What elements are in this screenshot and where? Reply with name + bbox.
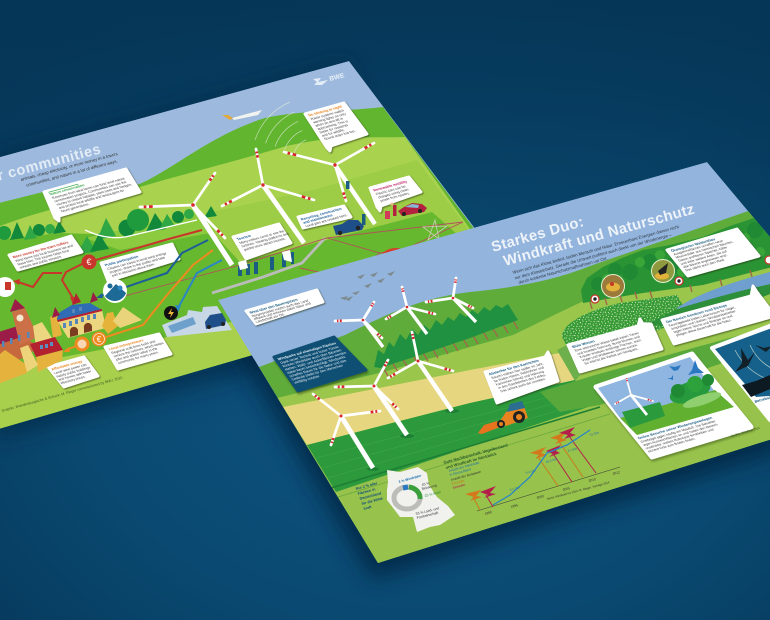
sky: [218, 162, 770, 563]
icon: red euro coin: €: [86, 257, 92, 267]
land-use ring: [394, 487, 420, 509]
blue car: [205, 313, 226, 329]
turbine e: [335, 360, 414, 438]
axis years: 1990: [484, 510, 493, 516]
callout: flower meadows: und Insekten Nahrung. Bunte Blumen und: [576, 335, 641, 356]
callout: above treetops: Landschaft vor Ort.: [255, 312, 286, 324]
callout: navy info box: [274, 337, 366, 391]
icon: beetle badge: [602, 274, 624, 298]
callout: nature conservation: Revenues from wind farms can fund local nature: [51, 177, 126, 200]
callout: affordable energy: and homes with lower: [57, 369, 93, 382]
yellow field: [283, 352, 575, 445]
olive land: [277, 250, 770, 565]
callout: affordable energy: Affordable energy: [51, 359, 84, 371]
callout: flower meadows: So wächst die Vielfalt am Windpark.: [583, 347, 639, 365]
map labels: [398, 473, 441, 520]
turbine c: [426, 278, 476, 322]
callout: forest conversion: Ökologischer Waldumbau: [669, 236, 717, 253]
tractor: [478, 401, 528, 434]
text: area share: Flächen in: [357, 487, 377, 496]
value labels: 27 GW: [567, 447, 577, 453]
callout: navy info box: Dank neuer Technik und hoher Türme: [280, 345, 340, 365]
town hall: [52, 292, 106, 338]
callout: recycling: and maintenance: [302, 213, 334, 225]
icon: people globe: [103, 279, 127, 303]
logo: BWE: BWE: [329, 72, 346, 83]
callout: tractor: [485, 352, 558, 403]
intro text: communities, and nature in a lot of different ways.: [26, 158, 118, 188]
callout: local entrepreneurs: [105, 334, 171, 369]
text: area share: für die Wind-: [361, 496, 385, 506]
callout: waters: Der Bereich Gewässer rund Biotope: [665, 304, 728, 324]
card text: legen Ausweichflächen an und halten den Bereich: [642, 423, 719, 447]
icon: left circle: [0, 277, 15, 297]
callout: flower meadows: Blüte Wiesen: [571, 339, 596, 349]
callout: forest conversion: Mischwälder aus heimischen Bäumen.: [675, 240, 735, 259]
icon: woodpecker badge: [652, 260, 674, 282]
card birds: [667, 360, 704, 380]
callout: forest conversion: [667, 229, 759, 276]
turbine d: [388, 332, 459, 413]
callout: tourism: Tourism: [236, 234, 253, 241]
callout: no blinking at night: approaching. This is: [317, 119, 349, 131]
turbine 2: [222, 149, 314, 243]
ground: [0, 212, 456, 428]
card sky: [598, 357, 715, 418]
axis years: 2005: [562, 486, 571, 492]
building: [162, 306, 232, 337]
red car: [398, 203, 427, 216]
icon: orange socket coin: [74, 336, 90, 352]
bird stakes: [473, 432, 596, 510]
callout: local entrepreneurs: Regional craft firms build and: [110, 340, 156, 355]
callout: public participation: part in decisions about them.: [111, 262, 156, 278]
callout: navy info box: können Windräder auch über Bäumen: [282, 348, 342, 368]
card text: [637, 416, 725, 453]
callout: no blinking at night: warning lights on only: [312, 112, 347, 124]
callout: tourism: [233, 224, 292, 259]
sky: [0, 61, 474, 228]
map labels: Forstwirtschaft: [416, 511, 439, 520]
intro text: nur dem Klimaschutz. Gerade die Umwelt profitiert auch direkt von der Windenergie –: [514, 232, 673, 280]
callout: nature conservation: money to restore habitats, plant trees and hedges,: [56, 183, 133, 207]
technician: [346, 181, 366, 225]
white path: [85, 220, 197, 238]
callout: town coffers: schools and public services.: [19, 255, 63, 270]
power lines: [117, 222, 463, 298]
callout: affordable energy: Local wind power can: [53, 363, 88, 375]
callout: local entrepreneurs: jobs and added value in the: [114, 347, 158, 362]
conifer forest: [374, 304, 518, 376]
legend: Rotmilan: [451, 479, 465, 486]
map labels: 45 %: [421, 481, 430, 487]
icon: no sign mid: [675, 277, 683, 285]
lower olive: [336, 350, 770, 565]
callout: forest conversion: alte Bäume angewiesen sind.: [682, 253, 728, 269]
source line: Quellen: Windkraft 2015: [730, 426, 761, 438]
card text: sichere Orte zum Brüten finden.: [647, 437, 697, 453]
title: Windkraft und Naturschutz: [502, 202, 697, 270]
turbine 3: [284, 143, 375, 224]
callout: recycling: Local jobs are created here.: [304, 213, 348, 228]
callout: public participation: [101, 244, 179, 281]
trunk rows: [382, 319, 518, 376]
callout: public participation: Citizens can invest in local wind energy: [106, 251, 167, 271]
chart: [443, 427, 621, 516]
axis years: 2012: [612, 470, 621, 476]
callout: tractor: Bauern mähen hier später im Jahr.: [491, 362, 544, 380]
legend: [448, 460, 481, 490]
callout: local entrepreneurs: service the turbines, which keeps: [113, 341, 165, 358]
icon: orange euro coin: €: [97, 335, 102, 344]
callout: above treetops: [246, 290, 323, 324]
callout: local entrepreneurs: community for many years.: [117, 350, 160, 365]
axis years: 2010: [588, 477, 597, 483]
callout: nature conservation: conservation projects. Communities can use the: [53, 180, 127, 203]
bird card: [596, 354, 751, 457]
callout: navy info box: dabei kaum beeinträchtigt. Windparks: [286, 355, 346, 375]
card text: Greifvögel jagen häufig am Mastfuß. Die Betreiber: [640, 419, 717, 444]
callout: nature conservation: future generations.: [60, 202, 90, 213]
callout: no blinking at night: Sound stays low too.: [323, 129, 356, 141]
callout: town coffers: lease fees. The income helps fund: [17, 249, 70, 266]
card text: Online Besuche seiner Windenergieanlagen: [637, 416, 714, 440]
icon: red euro coin: [82, 254, 96, 270]
callout: tourism: turbines. Viewing platforms and: [241, 232, 290, 248]
sound arcs: [255, 102, 306, 153]
callout: tractor: So finden Hasen, Rebhühner und: [493, 366, 545, 383]
flock of birds: [340, 271, 395, 301]
turbine f: [313, 394, 380, 471]
legend: Anzahl der Brutpaare: [450, 470, 481, 482]
callout: tractor: Abstecher für den Kaninchen: [488, 359, 540, 376]
deciduous forest: [581, 217, 770, 309]
logo: BWE: [313, 72, 346, 85]
text: area share: kraft: [363, 505, 373, 511]
grey road: [212, 238, 325, 293]
callout: waters: Feuchtgebiete bieten Lebensraum für Vögel,: [668, 306, 736, 328]
callout: flower meadows: Eine artenreiche Wiese bietet vielen Tieren: [574, 331, 640, 353]
value labels: 6.1 GW: [509, 485, 520, 492]
icon: plane: [222, 110, 262, 120]
crowd: [238, 250, 294, 276]
callout: town coffers: [9, 236, 82, 270]
houses right: [102, 307, 142, 334]
intro text: durch konkrete Naturschutzmaßnahmen vor Ort.: [518, 256, 608, 285]
card body: [596, 354, 751, 457]
intro text: Wenn sich das Klima ändert, leiden Mensch und Natur. Erneuerbare Energien dienen nicht: [512, 224, 680, 275]
panel: front poster Starkes Duo: [218, 162, 770, 565]
tree row: [0, 206, 217, 254]
callout: tractor: in den Randstreifen des Feldes.: [497, 373, 547, 390]
legend: in Deutschland: [449, 467, 471, 477]
callout: no blinking at night: [305, 103, 367, 151]
icon: orange euro coin: [92, 332, 106, 346]
source: Stand: Windkraft bis 2012; M. Rieger, Vorträge 2014: [546, 480, 610, 501]
value labels: [509, 431, 599, 492]
callout: renewable mobility: power from nearby.: [379, 191, 410, 203]
shadow of front poster: [206, 280, 770, 580]
callout: town coffers: More money for the town coffers: [12, 241, 69, 259]
callout: renewable mobility: [370, 177, 421, 211]
blue road car: [333, 220, 364, 235]
callout: tourism: guided tours attract tourists.: [243, 237, 287, 252]
callout: town coffers: Wind farms pay local business tax and: [14, 244, 74, 263]
text: area share: Nur 2 % aller: [355, 481, 378, 491]
callout: waters: legen kleine Teiche und Biotope an und: [673, 314, 734, 334]
chart title: Gute Nachbarschaft: Vogelbestand: [443, 442, 509, 465]
mid green band: [540, 327, 770, 412]
callout: above treetops: Wind über den Baumspitzen: [249, 298, 299, 315]
map labels: Bebauung: [421, 483, 437, 491]
front light strip: [0, 322, 252, 428]
callout: tractor: Kaninchen Schutz und Nahrung: [495, 370, 545, 387]
callout: recycling: Recycling, construction: [300, 207, 343, 221]
dark hill: [259, 200, 770, 565]
callout: forest conversion: Ausgleichsflächen schaffen neue: [672, 239, 724, 256]
text: area share: Deutschland: [359, 491, 382, 501]
field border: [331, 407, 600, 488]
callout: flower meadows: Vögel und Wildbienen kehren zurück.: [581, 343, 639, 362]
callout: nature conservation: and protect local wildlife and landscapes for: [58, 188, 126, 210]
axis years: 1995: [510, 503, 519, 509]
callout: waters: [662, 286, 770, 344]
icon: no sign left: [591, 295, 599, 303]
chart title: und Windkraft im Rückblick: [445, 451, 498, 470]
axis: [477, 467, 620, 511]
red roof: [382, 248, 400, 254]
text: area share: [355, 481, 385, 511]
callout: navy info box: vielfältig nutzbar.: [293, 374, 321, 385]
charging person: [385, 202, 396, 219]
light meadow: [0, 137, 470, 428]
flower meadow: [562, 295, 690, 352]
callout: navy info box: schaffen Raum für die Natur und das: [288, 359, 347, 378]
value labels: 9.4 GW: [525, 468, 536, 475]
callout: renewable mobility: charged using clean: [377, 188, 410, 199]
forest strip: [85, 212, 215, 250]
callout: local entrepreneurs: Local entrepreneurs: [108, 338, 144, 351]
map labels: 25 % Wald: [424, 490, 441, 498]
bat card: [712, 322, 770, 425]
callout: tourism: Many visitors come to see the: [238, 229, 285, 245]
callout: flower meadows: [568, 319, 662, 372]
card turbine: [615, 377, 653, 415]
callout: nature conservation: Nature conservation: [49, 183, 86, 196]
legend: Anzahl der Windräder: [448, 460, 481, 473]
map labels: 53 % Land- und: [415, 506, 440, 516]
intro text: animals, cheap electricity, or more money in a town's: [20, 151, 118, 182]
axis years: 2000: [536, 494, 545, 500]
callout: navy info box: Gelände bleibt für den Menschen: [291, 364, 344, 381]
callout: nature conservation: [44, 169, 140, 221]
value labels: 16.6 GW: [545, 457, 558, 464]
callout: no blinking at night: better for residents: [319, 123, 349, 134]
callout: public participation: Public participation: [104, 255, 140, 267]
callout: renewable mobility: Renewable mobility: [373, 180, 409, 192]
callout: no blinking at night: when an aircraft is: [314, 117, 344, 128]
callout: no blinking at night: and for wildlife.: [321, 128, 346, 138]
callout: no blinking at night: Radar systems switch: [310, 109, 345, 121]
callout: above treetops: Bürgerprojekte nutzen auch das Land: [251, 299, 309, 318]
callout: waters: pflegen diese dauerhaft für die Natur.: [675, 318, 733, 337]
card grass: [620, 390, 734, 435]
dark field: [307, 380, 600, 492]
icon: lightning: [164, 306, 178, 320]
callout: recycling: [298, 206, 351, 228]
bird markers: [465, 427, 576, 501]
credits: Graphic: Brandenburgische & Schuck; M. Rieger commissioned by BMU, 2010: [1, 376, 123, 413]
callout: forest conversion: Das stärkt auch den Wald.: [684, 258, 726, 272]
germany map: [387, 467, 455, 532]
callout: forest conversion: Davon profitieren Spechte, Käfer: [677, 245, 729, 263]
card hedge: [622, 402, 665, 428]
card text: unattraktiv, sodass Rotmilane fernbleiben und: [644, 428, 715, 450]
shadow of back poster: [0, 61, 360, 440]
callout: tractor: Das schont auch die Insekten.: [499, 377, 547, 393]
map labels: 2 % Windräder: [398, 473, 423, 484]
panel: back poster for communities: [0, 61, 520, 432]
value labels: 31 GW: [589, 431, 599, 437]
callout: affordable energy: electricity prices.: [60, 375, 87, 385]
town: church and houses: [0, 299, 63, 385]
callout: waters: Amphibien und Libellen. Windparkbetreiber: [670, 309, 738, 331]
card trees: [667, 374, 723, 411]
callout: affordable energy: supply public buildings: [55, 366, 91, 378]
callout: forest conversion: und viele weitere Arten, die auf: [680, 250, 728, 266]
icon: pylon star: [423, 220, 447, 240]
turbine a: [335, 302, 383, 347]
callout: renewable mobility: Electric cars can be: [375, 185, 407, 196]
callout: public participation: projects, share in the profits and take: [109, 256, 166, 274]
turbine 1: [140, 173, 232, 265]
legend: Seeadler: [452, 482, 467, 490]
callout: no blinking at night: No blinking at night: [308, 105, 344, 117]
callout: above treetops: effizient und schonen dabei Natur und: [253, 302, 312, 321]
turbine b: [386, 287, 435, 334]
callout: navy info box: Windparks auf ehemaligen Flächen: [277, 342, 337, 361]
title: Starkes Duo:: [490, 214, 586, 256]
wind line: [493, 430, 590, 505]
lake: [650, 272, 770, 330]
icon: no sign right: [765, 256, 770, 264]
network lines: [13, 230, 222, 352]
callout: affordable energy: [48, 357, 98, 387]
callout: navy info box: stehen. Wald- und Ackerflächen werden: [284, 351, 347, 372]
field stripes: [316, 388, 594, 478]
dark hill: [0, 107, 520, 430]
middle meadow: [204, 160, 468, 260]
callout: flower meadows: Kräuter ersetzen eintönige Flächen, auch: [579, 338, 642, 359]
axis years: [484, 470, 621, 516]
